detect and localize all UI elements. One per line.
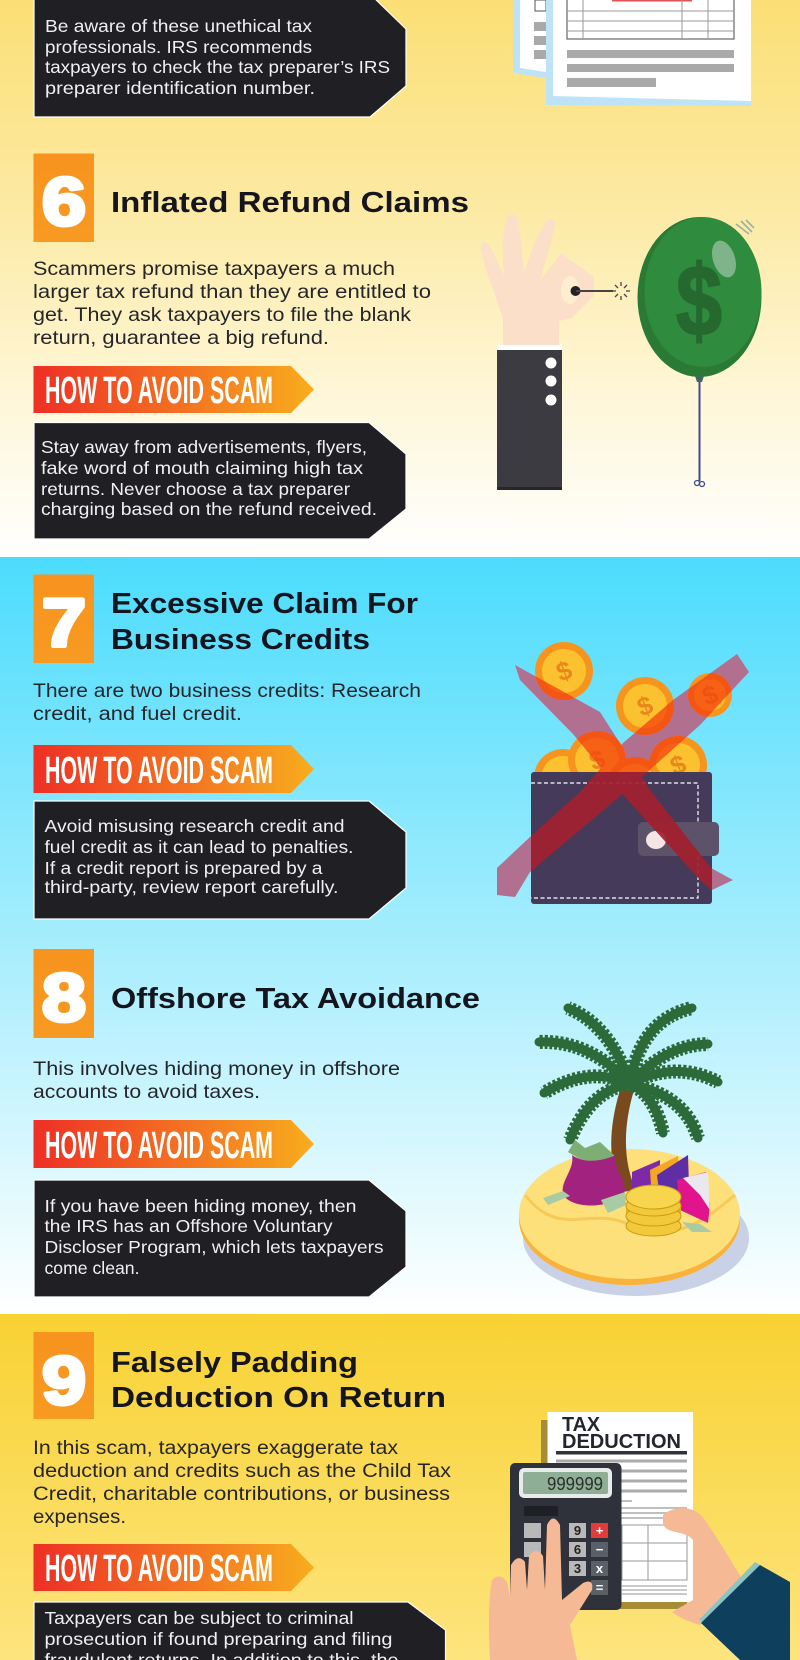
callout: avoid scam advice: Taxpayers can be subject to criminal [44, 1608, 354, 1628]
badge: number 9 [34, 1332, 94, 1419]
banner: how to avoid scam: HOW TO AVOID SCAM [45, 370, 273, 412]
callout: box tip text: taxpayers to check the tax preparer’s IRS [45, 57, 390, 77]
banner: how to avoid scam [34, 1120, 314, 1168]
panel: section 9 yellow [0, 1314, 800, 1660]
text block: description: return, guarantee a big refund. [33, 327, 329, 349]
text block: description: In this scam, taxpayers exaggerate tax [33, 1437, 398, 1459]
text block: description: credit, and fuel credit. [33, 703, 242, 725]
illustration: tax documents [513, 0, 751, 106]
illustration: tax deduction form and calculator: = [596, 1580, 604, 1595]
text block: description: accounts to avoid taxes. [33, 1081, 260, 1103]
banner: how to avoid scam [34, 1544, 314, 1591]
badge: number 8 [34, 949, 94, 1038]
callout: avoid scam advice: If you have been hiding money, then [44, 1196, 356, 1216]
badge: number 8: 8 [42, 960, 86, 1036]
banner: how to avoid scam [34, 366, 314, 413]
text block: description [33, 258, 431, 349]
heading: Excessive Claim For Business Credits [111, 588, 418, 656]
heading: Offshore Tax Avoidance: Offshore Tax Avoidance [111, 983, 480, 1015]
callout: avoid scam advice: returns. Never choose a tax preparer [41, 479, 350, 499]
callout: avoid scam advice [34, 1180, 406, 1297]
callout: avoid scam advice: the IRS has an Offshore Voluntary [44, 1216, 333, 1236]
panel: section 6 yellow [0, 0, 800, 557]
heading: Inflated Refund Claims: Inflated Refund Claims [111, 187, 469, 219]
text block: description [33, 1058, 400, 1103]
callout: avoid scam advice: Discloser Program, which lets taxpayers [44, 1237, 384, 1257]
text block: description: Credit, charitable contributions, or business [33, 1483, 450, 1505]
illustration: tax deduction form and calculator: 6 [574, 1542, 581, 1557]
illustration: tax deduction form and calculator [489, 1412, 790, 1660]
text block: description: Scammers promise taxpayers a much [33, 258, 395, 280]
badge: number 7: 7 [42, 585, 86, 661]
illustration: tax deduction form and calculator: + [596, 1523, 604, 1538]
illustration: palm tree island with money [519, 1008, 749, 1296]
text block: description: expenses. [33, 1506, 126, 1528]
banner: how to avoid scam [34, 745, 314, 793]
heading: Excessive Claim For Business Credits: Excessive Claim For [111, 588, 418, 620]
banner: how to avoid scam: HOW TO AVOID SCAM [45, 750, 273, 792]
illustration: wallet with coins crossed out: $ [585, 743, 609, 777]
callout: avoid scam advice [34, 422, 406, 539]
heading: Falsely Padding Deduction On Return: Deduction On Return [111, 1382, 446, 1414]
banner: how to avoid scam: HOW TO AVOID SCAM [45, 1125, 273, 1167]
callout: avoid scam advice: come clean. [44, 1258, 140, 1278]
callout: avoid scam advice: prosecution if found preparing and filing [44, 1629, 392, 1649]
text block: description: This involves hiding money in offshore [33, 1058, 400, 1080]
illustration: tax deduction form and calculator: − [596, 1542, 604, 1557]
badge: number 6: 6 [42, 164, 86, 240]
illustration: tax deduction form and calculator: 999999 [547, 1474, 603, 1494]
illustration: wallet with coins crossed out: $ [552, 654, 576, 688]
panel: section 7 and 8 blue [0, 557, 800, 1314]
callout: box tip text: professionals. IRS recommends [45, 37, 312, 57]
illustration: wallet with coins crossed out [497, 642, 749, 904]
banner: how to avoid scam: HOW TO AVOID SCAM [45, 1548, 273, 1590]
callout: avoid scam advice: third-party, review report carefully. [44, 877, 338, 897]
illustration: tax deduction form and calculator: x [596, 1561, 604, 1576]
callout: avoid scam advice: If a credit report is prepared by a [44, 858, 323, 878]
text block: description: There are two business credits: Research [33, 680, 421, 702]
badge: number 6 [34, 154, 94, 242]
callout: box tip text: Be aware of these unethical tax [45, 16, 312, 36]
callout: avoid scam advice: Avoid misusing research credit and [44, 816, 344, 836]
text block: description: get. They ask taxpayers to file the blank [33, 304, 411, 326]
text block: description [33, 680, 421, 725]
illustration: wallet with coins crossed out: $ [666, 748, 690, 782]
illustration: wallet with coins crossed out: $ [633, 689, 657, 723]
heading: Falsely Padding Deduction On Return: Falsely Padding [111, 1347, 358, 1379]
illustration: tax deduction form and calculator: 9 [574, 1523, 581, 1538]
illustration: tax deduction form and calculator: TAX [562, 1414, 601, 1436]
callout: avoid scam advice: charging based on the refund received. [41, 499, 377, 519]
illustration: tax deduction form and calculator: 3 [574, 1561, 581, 1576]
callout: avoid scam advice: fake word of mouth claiming high tax [41, 458, 363, 478]
callout: box tip text [34, 0, 406, 117]
text block: description: deduction and credits such as the Child Tax [33, 1460, 451, 1482]
illustration: hand popping balloon: $ [676, 245, 722, 357]
callout: avoid scam advice [34, 1602, 446, 1660]
text block: description [33, 1437, 451, 1528]
heading: Falsely Padding Deduction On Return [111, 1347, 446, 1414]
badge: number 9: 9 [42, 1343, 86, 1419]
badge: number 7 [34, 574, 94, 663]
callout: avoid scam advice: Stay away from advertisements, flyers, [41, 437, 367, 457]
callout: avoid scam advice [34, 801, 406, 919]
illustration: wallet with coins crossed out: $ [698, 678, 722, 712]
callout: box tip text: preparer identification number. [45, 78, 315, 98]
callout: avoid scam advice: fuel credit as it can lead to penalties. [44, 837, 354, 857]
text block: description: larger tax refund than they are entitled to [33, 281, 431, 303]
illustration: tax deduction form and calculator: DEDUCTION [562, 1431, 681, 1453]
heading: Excessive Claim For Business Credits: Business Credits [111, 624, 370, 656]
illustration: hand popping balloon [481, 214, 762, 490]
